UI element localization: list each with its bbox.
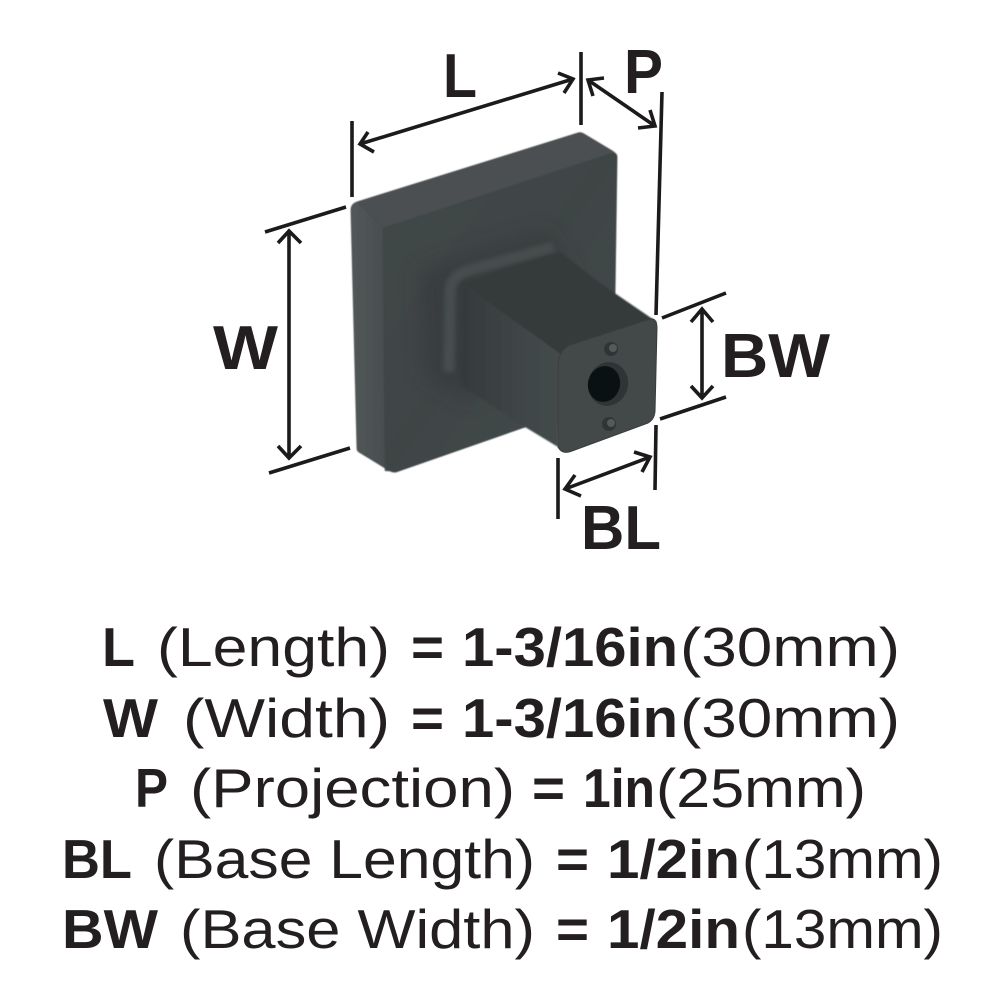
spec line: base width: BW bbox=[62, 898, 158, 960]
spec line: base width: = bbox=[556, 898, 589, 960]
label L: L bbox=[443, 42, 477, 111]
spec line: base length: 1/2in bbox=[607, 828, 740, 890]
spec line: projection: (Projection) bbox=[190, 757, 515, 819]
spec line: length: = bbox=[411, 616, 444, 678]
spec line: width: (30mm) bbox=[680, 687, 900, 749]
stem: end face bbox=[558, 319, 657, 452]
arrow W bbox=[278, 231, 301, 458]
spec line: projection: = bbox=[532, 757, 565, 819]
label W: W bbox=[213, 314, 279, 383]
plate: top edge bbox=[357, 133, 614, 228]
dimension BW bbox=[660, 293, 831, 419]
plate: whole silhouette bbox=[351, 133, 617, 472]
spec line: base width: 1/2in bbox=[607, 898, 740, 960]
product: square knob with stem bbox=[351, 133, 657, 472]
spec line: projection: P bbox=[135, 757, 168, 819]
spec line: base width: (Base Width) bbox=[180, 898, 535, 960]
spec line: width: W bbox=[103, 687, 158, 749]
spec line: projection bbox=[135, 757, 866, 819]
arrow BW bbox=[691, 309, 713, 398]
dimension BL bbox=[558, 425, 661, 563]
spec line: base length: = bbox=[556, 828, 589, 890]
spec line: base width bbox=[62, 898, 943, 960]
arrow BL bbox=[565, 452, 650, 496]
spec line: width: = bbox=[411, 687, 444, 749]
spec line: length: (Length) bbox=[157, 616, 390, 678]
spec line: projection: 1in bbox=[583, 757, 655, 819]
arrow P bbox=[588, 78, 655, 128]
plate: left edge bbox=[351, 202, 390, 471]
label P: P bbox=[624, 38, 663, 107]
spec line: base length: (Base Length) bbox=[154, 828, 535, 890]
plate: shadow around stem bbox=[420, 232, 575, 400]
spec line: width: (Width) bbox=[183, 687, 390, 749]
hole ring bbox=[583, 358, 633, 410]
stem: top face bbox=[462, 252, 657, 354]
spec line: base length bbox=[62, 828, 943, 890]
dimension W bbox=[213, 207, 350, 473]
top pin bbox=[604, 342, 618, 356]
spec line: projection: (25mm) bbox=[656, 757, 866, 819]
spec line: base length: BL bbox=[62, 828, 132, 890]
arrow L bbox=[360, 73, 573, 152]
spec line: width bbox=[103, 687, 900, 749]
hole bbox=[584, 362, 624, 406]
dimension P bbox=[588, 38, 663, 315]
dimension L bbox=[352, 42, 581, 197]
stem collar bbox=[449, 247, 553, 372]
stem: side face bbox=[461, 283, 560, 447]
spec line: length: 1-3/16in bbox=[462, 616, 678, 678]
spec line: base length: (13mm) bbox=[742, 828, 943, 890]
plate: front face bbox=[383, 153, 617, 472]
label BW: BW bbox=[721, 322, 831, 391]
bottom pin bbox=[602, 417, 616, 431]
label BL: BL bbox=[581, 494, 661, 563]
spec line: width: 1-3/16in bbox=[462, 687, 678, 749]
spec line: length: (30mm) bbox=[680, 616, 900, 678]
spec line: length: L bbox=[102, 616, 135, 678]
spec line: base width: (13mm) bbox=[742, 898, 943, 960]
spec line: length bbox=[102, 616, 900, 678]
